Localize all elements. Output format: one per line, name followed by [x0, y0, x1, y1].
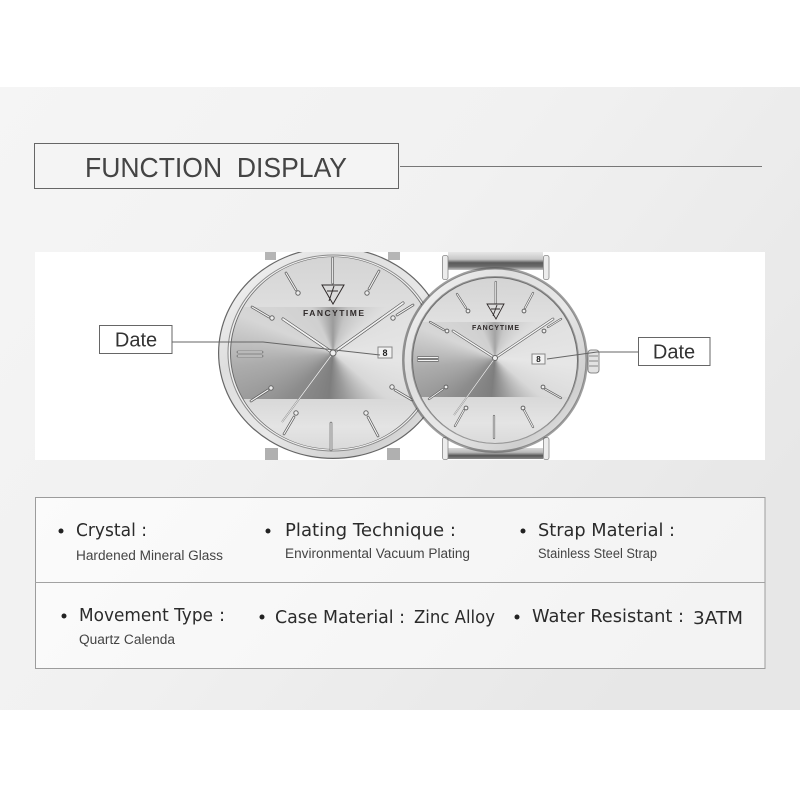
large watch strap	[265, 250, 400, 462]
panel: specifications table	[35, 498, 765, 668]
small watch date window: 8	[536, 355, 541, 364]
spec: case material: Case Material :	[275, 607, 405, 628]
small watch markers	[418, 282, 561, 438]
spec: plating technique	[266, 520, 470, 561]
callout: date right: Date	[653, 342, 695, 364]
small watch hands	[453, 319, 553, 415]
large watch logo	[303, 285, 364, 318]
spec: crystal	[58, 520, 223, 563]
heading: function display: FUNCTION DISPLAY	[85, 152, 347, 183]
heading: function display	[34, 144, 762, 188]
large watch date window: 8	[382, 348, 388, 358]
spec: strap material	[520, 520, 675, 561]
small watch date window	[532, 354, 545, 364]
small watch case	[402, 267, 588, 453]
spec: water resistant	[514, 606, 743, 629]
spec: movement type: Quartz Calenda	[79, 632, 175, 647]
spec: water resistant: Water Resistant :	[532, 606, 684, 627]
callout: date left	[100, 326, 380, 355]
large watch dial	[231, 257, 435, 449]
spec: case material: Zinc Alloy	[414, 607, 495, 628]
small watch logo: FANCYTIME	[472, 325, 519, 332]
spec: water resistant: 3ATM	[693, 608, 743, 629]
small watch	[402, 252, 599, 460]
panel: watch photo strip	[35, 252, 765, 460]
small watch dial	[413, 278, 577, 443]
small watch logo	[472, 304, 519, 332]
small watch strap	[442, 252, 549, 460]
spec: movement type	[62, 605, 225, 647]
large watch date window	[378, 347, 392, 358]
large watch hands	[282, 303, 403, 422]
spec: strap material: Strap Material :	[538, 520, 675, 541]
spec: crystal: Crystal :	[76, 520, 147, 541]
large watch logo: FANCYTIME	[303, 308, 364, 318]
large watch markers	[238, 258, 413, 450]
callout: date right	[547, 338, 710, 366]
spec: case material	[260, 607, 495, 628]
spec: movement type: :	[219, 605, 225, 626]
small watch crown	[588, 350, 599, 373]
spec: strap material: Stainless Steel Strap	[538, 546, 657, 561]
spec: movement type: Movement Type	[79, 605, 213, 626]
spec: crystal: Hardened Mineral Glass	[76, 548, 223, 563]
large watch case	[218, 247, 448, 459]
callout: date left: Date	[115, 330, 157, 352]
spec: plating technique: Environmental Vacuum Plating	[285, 546, 470, 561]
grey background panel	[0, 87, 800, 710]
spec: plating technique: Plating Technique :	[285, 520, 456, 541]
large watch	[218, 252, 430, 460]
